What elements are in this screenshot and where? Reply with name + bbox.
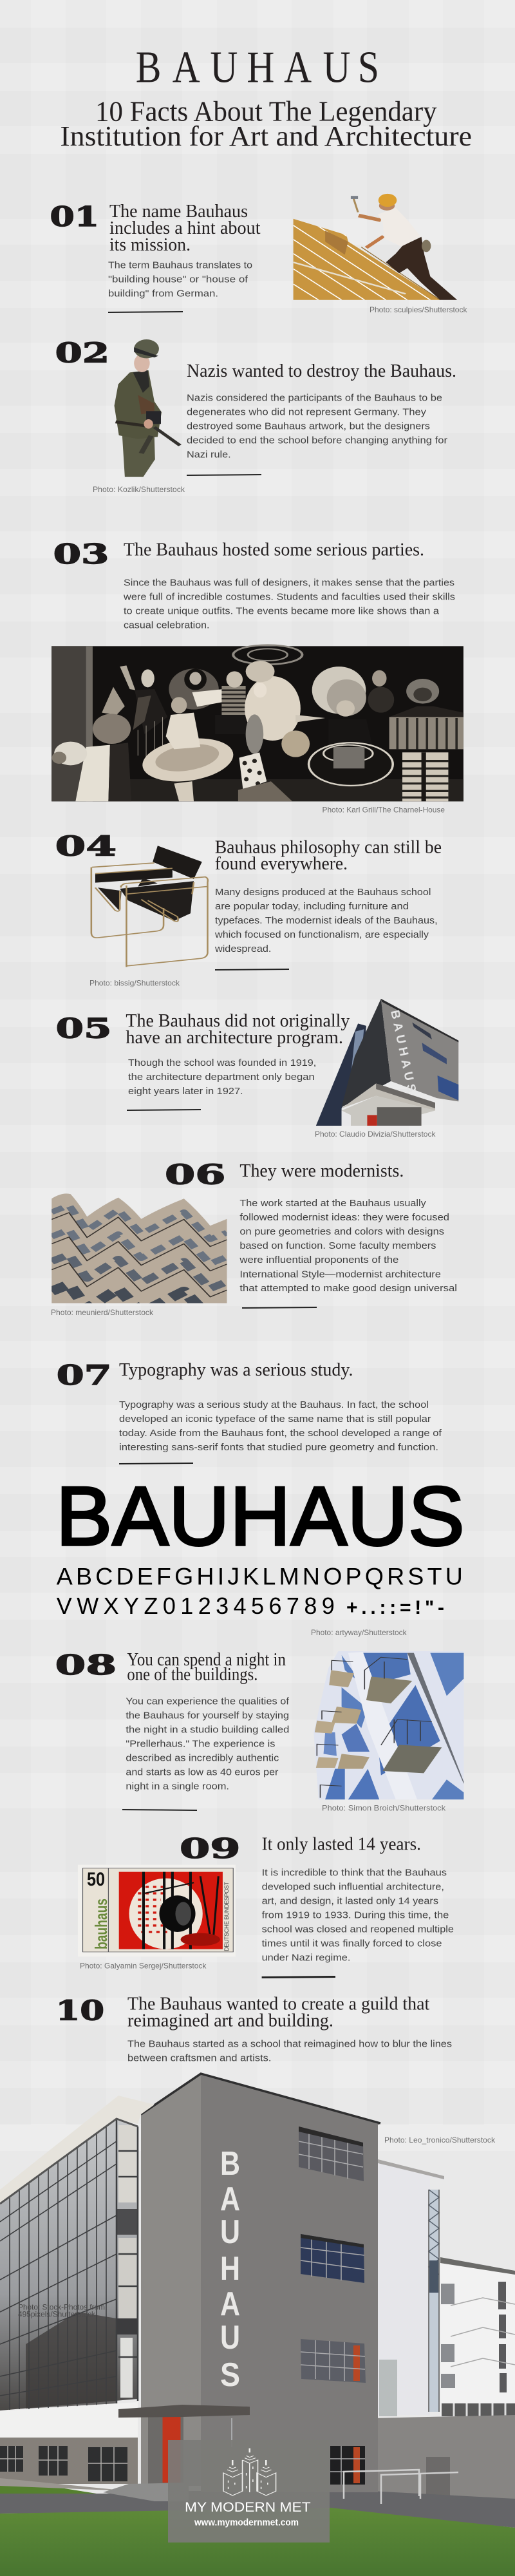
body 09: developed such influential architecture, [262, 1882, 444, 1893]
photo: Triadic Ballet costumes [52, 645, 464, 801]
white band and ground floor of left wing [0, 2402, 138, 2491]
body 01: building" from German. [108, 288, 218, 299]
body 07: today. Aside from the Bauhaus font, the school developed a range of [119, 1428, 442, 1439]
stray caption on glass: 495pixels/Shutterstock [18, 2310, 96, 2319]
typeface specimen: VWXYZ0123456789 [57, 1593, 335, 1619]
heading 01: its mission. [109, 235, 191, 255]
caption 02: Photo: Kozlik/Shutterstock [93, 485, 185, 494]
typeface specimen: BAUHAUS [56, 1469, 465, 1563]
caption 10: Photo: Leo_tronico/Shutterstock [384, 2136, 496, 2145]
body 08: described as incredibly authentic [126, 1753, 279, 1764]
sign lettering on building: BAUHAUS [388, 1009, 418, 1094]
body 09: art, and design, it lasted only 14 years [262, 1896, 438, 1907]
title: BAUHAUS [136, 43, 379, 93]
vertical sign letters: B [220, 2145, 240, 2183]
icon: three towers [223, 2448, 276, 2496]
heading 04 [215, 837, 442, 874]
body 07 [119, 1399, 442, 1453]
caption 03: Photo: Karl Grill/The Charnel-House [322, 806, 445, 815]
lawn [0, 2508, 515, 2576]
body 02: degenerates who did not represent Germany. They [187, 407, 427, 418]
body 02: destroyed some Bauhaus artwork, but the designers [187, 421, 430, 432]
subtitle: 10 Facts About The Legendary [95, 96, 437, 128]
heading 05: The Bauhaus did not originally [126, 1011, 350, 1031]
caption 04: Photo: bissig/Shutterstock [89, 979, 180, 988]
entrance door and canopy [103, 2405, 250, 2501]
body 03: were full of incredible costumes. Students and faculties used their skills [123, 591, 455, 602]
body 09 [262, 1868, 454, 1964]
heading 08: You can spend a night in [127, 1650, 286, 1670]
body 08: and starts as low as 40 euros per [126, 1767, 278, 1778]
vertical sign letters: A [220, 2181, 240, 2218]
body 06: followed modernist ideas: they were focused [239, 1212, 449, 1223]
heading 10 [127, 1994, 430, 2031]
handrails [344, 2470, 458, 2504]
body 01 [108, 260, 252, 299]
body 03: Since the Bauhaus was full of designers, it makes sense that the parties [124, 577, 454, 588]
tower wall left face [141, 2074, 201, 2486]
heading 02: Nazis wanted to destroy the Bauhaus. [187, 361, 456, 381]
photo: Bauhaus building from below [316, 999, 458, 1126]
body 06: that attempted to make good design universal [239, 1283, 457, 1294]
body 02: Nazis considered the participants of the Bauhaus to be [187, 393, 442, 404]
body 06: were influential proponents of the [239, 1255, 398, 1265]
heading 10: The Bauhaus wanted to create a guild that [127, 1994, 430, 2014]
left wing roof band [0, 2096, 154, 2204]
heading 05 [126, 1011, 350, 1048]
photo: Bauhaus postage stamp: 50 [87, 1869, 105, 1890]
typeface specimen: ABCDEFGHIJKLMNOPQRSTU [57, 1563, 463, 1590]
heading 01: includes a hint about [109, 218, 261, 238]
body 05: the architecture department only began [128, 1072, 315, 1083]
vertical sign letters: U [220, 2319, 240, 2356]
body 07: Typography was a serious study at the Bauhaus. In fact, the school [119, 1399, 429, 1410]
body 08: You can experience the qualities of [126, 1696, 290, 1707]
body 09: from 1919 to 1933. During this time, the [262, 1910, 449, 1921]
body 10: The Bauhaus started as a school that reimagined how to blur the lines [127, 2039, 452, 2050]
body 06 [239, 1198, 457, 1294]
photo: Wassily chair [91, 846, 208, 967]
vertical sign letters: U [220, 2213, 240, 2251]
photo: Bauhaus postage stamp: DEUTSCHE BUNDESPOST [223, 1882, 230, 1951]
body 02: decided to end the school before changing anything for [187, 435, 447, 446]
body 08: the night in a studio building called [126, 1725, 289, 1736]
heading 01 [109, 202, 261, 255]
typeface specimen: +..::=!"- [346, 1597, 444, 1618]
heading 04: found everywhere. [215, 854, 348, 874]
caption 09: Photo: Galyamin Sergej/Shutterstock [80, 1962, 207, 1971]
body 05: eight years later in 1927. [128, 1086, 243, 1097]
panel: fact 02 [55, 337, 456, 494]
photo: soldier in uniform [115, 339, 180, 477]
vertical sign letters: A [220, 2286, 240, 2323]
small door [426, 2457, 450, 2499]
body 08: the Bauhaus for yourself by staying [126, 1710, 289, 1721]
caption 05: Photo: Claudio Divizia/Shutterstock [315, 1130, 436, 1139]
number 09: 09 [180, 1833, 241, 1864]
pavement [0, 2491, 515, 2528]
body 10: between craftsmen and artists. [127, 2053, 271, 2064]
logo box: My Modern Met: MY MODERN MET [185, 2500, 311, 2515]
caption 07: Photo: artyway/Shutterstock [311, 1628, 407, 1637]
body 08: "Prellerhaus." The experience is [126, 1739, 275, 1750]
body 06: The work started at the Bauhaus usually [239, 1198, 426, 1209]
logo box: My Modern Met: www.mymodernmet.com [194, 2517, 299, 2528]
number 07: 07 [57, 1359, 112, 1391]
photo: Bauhaus postage stamp [78, 1865, 236, 1956]
stray caption on glass [18, 2303, 105, 2319]
heading 10: reimagined art and building. [127, 2011, 333, 2031]
subtitle [60, 96, 472, 152]
body 03 [123, 577, 455, 631]
low wall [371, 2415, 515, 2500]
heading 09: It only lasted 14 years. [262, 1835, 421, 1855]
panel: fact 09 [78, 1833, 454, 1978]
caption 06: Photo: meunierd/Shutterstock [51, 1308, 154, 1317]
heading 06: They were modernists. [239, 1161, 404, 1181]
panel: fact 05 [56, 999, 458, 1139]
heading 01: The name Bauhaus [109, 202, 248, 222]
tower wall right face [201, 2074, 380, 2492]
panel: fact 01 [50, 194, 467, 314]
heading 08 [127, 1650, 286, 1685]
body 01: The term Bauhaus translates to [108, 260, 252, 270]
body 02: Nazi rule. [187, 450, 231, 460]
body 10 [127, 2039, 452, 2064]
body 07: developed an iconic typeface of the same name that is still popular [119, 1414, 431, 1425]
number 03: 03 [53, 538, 109, 570]
panel: fact 10 [0, 1994, 515, 2576]
number 04: 04 [55, 830, 117, 862]
body 03: to create unique outfits. The events became more like shows than a [124, 605, 440, 616]
white stair wing [378, 2159, 444, 2416]
vertical sign letters [220, 2145, 240, 2394]
panel: fact 07 [56, 1359, 465, 1637]
photo: Bauhaus Dessau building [0, 2074, 515, 2576]
number 01: 01 [50, 201, 99, 232]
panel: fact 03 [52, 538, 464, 815]
body 06: International Style—modernist architecture [239, 1269, 441, 1280]
photo: Bauhaus postage stamp: bauhaus [91, 1899, 111, 1949]
caption 01: Photo: sculpies/Shutterstock [370, 305, 467, 314]
building windows [299, 2126, 366, 2485]
body 02 [187, 393, 447, 460]
subtitle: Institution for Art and Architecture [60, 120, 472, 152]
heading 08: one of the buildings. [127, 1665, 258, 1685]
body 04: widespread. [214, 943, 271, 954]
photo: wavy modernist facade [52, 1193, 227, 1303]
heading 07: Typography was a serious study. [119, 1360, 353, 1380]
body 06: based on function. Some faculty members [239, 1240, 436, 1251]
stray caption on glass: Photo: Stock-Photos from [18, 2303, 105, 2312]
heading 05: have an architecture program. [126, 1028, 343, 1048]
body 09: under Nazi regime. [262, 1953, 350, 1964]
body 05 [128, 1057, 316, 1097]
body 09: It is incredible to think that the Bauhaus [262, 1868, 447, 1879]
body 09: school was closed and reopened multiple [262, 1924, 454, 1935]
number 02: 02 [55, 337, 109, 368]
body 04: Many designs produced at the Bauhaus school [215, 887, 431, 898]
body 03: casual celebration. [124, 620, 210, 631]
body 05: Though the school was founded in 1919, [128, 1057, 316, 1068]
heading 03: The Bauhaus hosted some serious parties. [124, 540, 424, 560]
body 07: interesting sans-serif fonts that studied pure geometry and function. [119, 1442, 438, 1453]
caption 08: Photo: Simon Broich/Shutterstock [322, 1804, 446, 1813]
body 04: typefaces. The modernist ideals of the Bauhaus, [215, 915, 438, 926]
body 04: are popular today, including furniture and [215, 901, 409, 912]
body 06: on pure geometries and colors with designs [239, 1226, 444, 1237]
body 04: which focused on functionalism, are especially [214, 929, 429, 940]
body 04 [214, 887, 438, 954]
heading 04: Bauhaus philosophy can still be [215, 837, 442, 857]
photo: roofer on a timber roof [294, 194, 457, 300]
vertical sign letters: S [220, 2356, 240, 2394]
photo: Prellerhaus balconies [314, 1651, 464, 1799]
curtain wall glass [0, 2119, 138, 2410]
logo box: My Modern Met [168, 2440, 330, 2543]
far dormitory wing [440, 2257, 515, 2418]
body 01: "building house" or "house of [108, 274, 248, 285]
typeface specimen [56, 1469, 465, 1619]
number 06: 06 [165, 1159, 225, 1190]
number 05: 05 [56, 1012, 112, 1045]
panel: fact 08 [55, 1649, 464, 1813]
body 09: times until it was finally forced to close [262, 1938, 442, 1949]
body 08: night in a single room. [126, 1781, 229, 1792]
body 08 [126, 1696, 290, 1792]
panel: fact 06 [51, 1159, 457, 1318]
number 10: 10 [56, 1995, 104, 2027]
number 08: 08 [55, 1649, 117, 1681]
vertical sign letters: H [220, 2250, 240, 2287]
panel: fact 04 [55, 830, 442, 988]
